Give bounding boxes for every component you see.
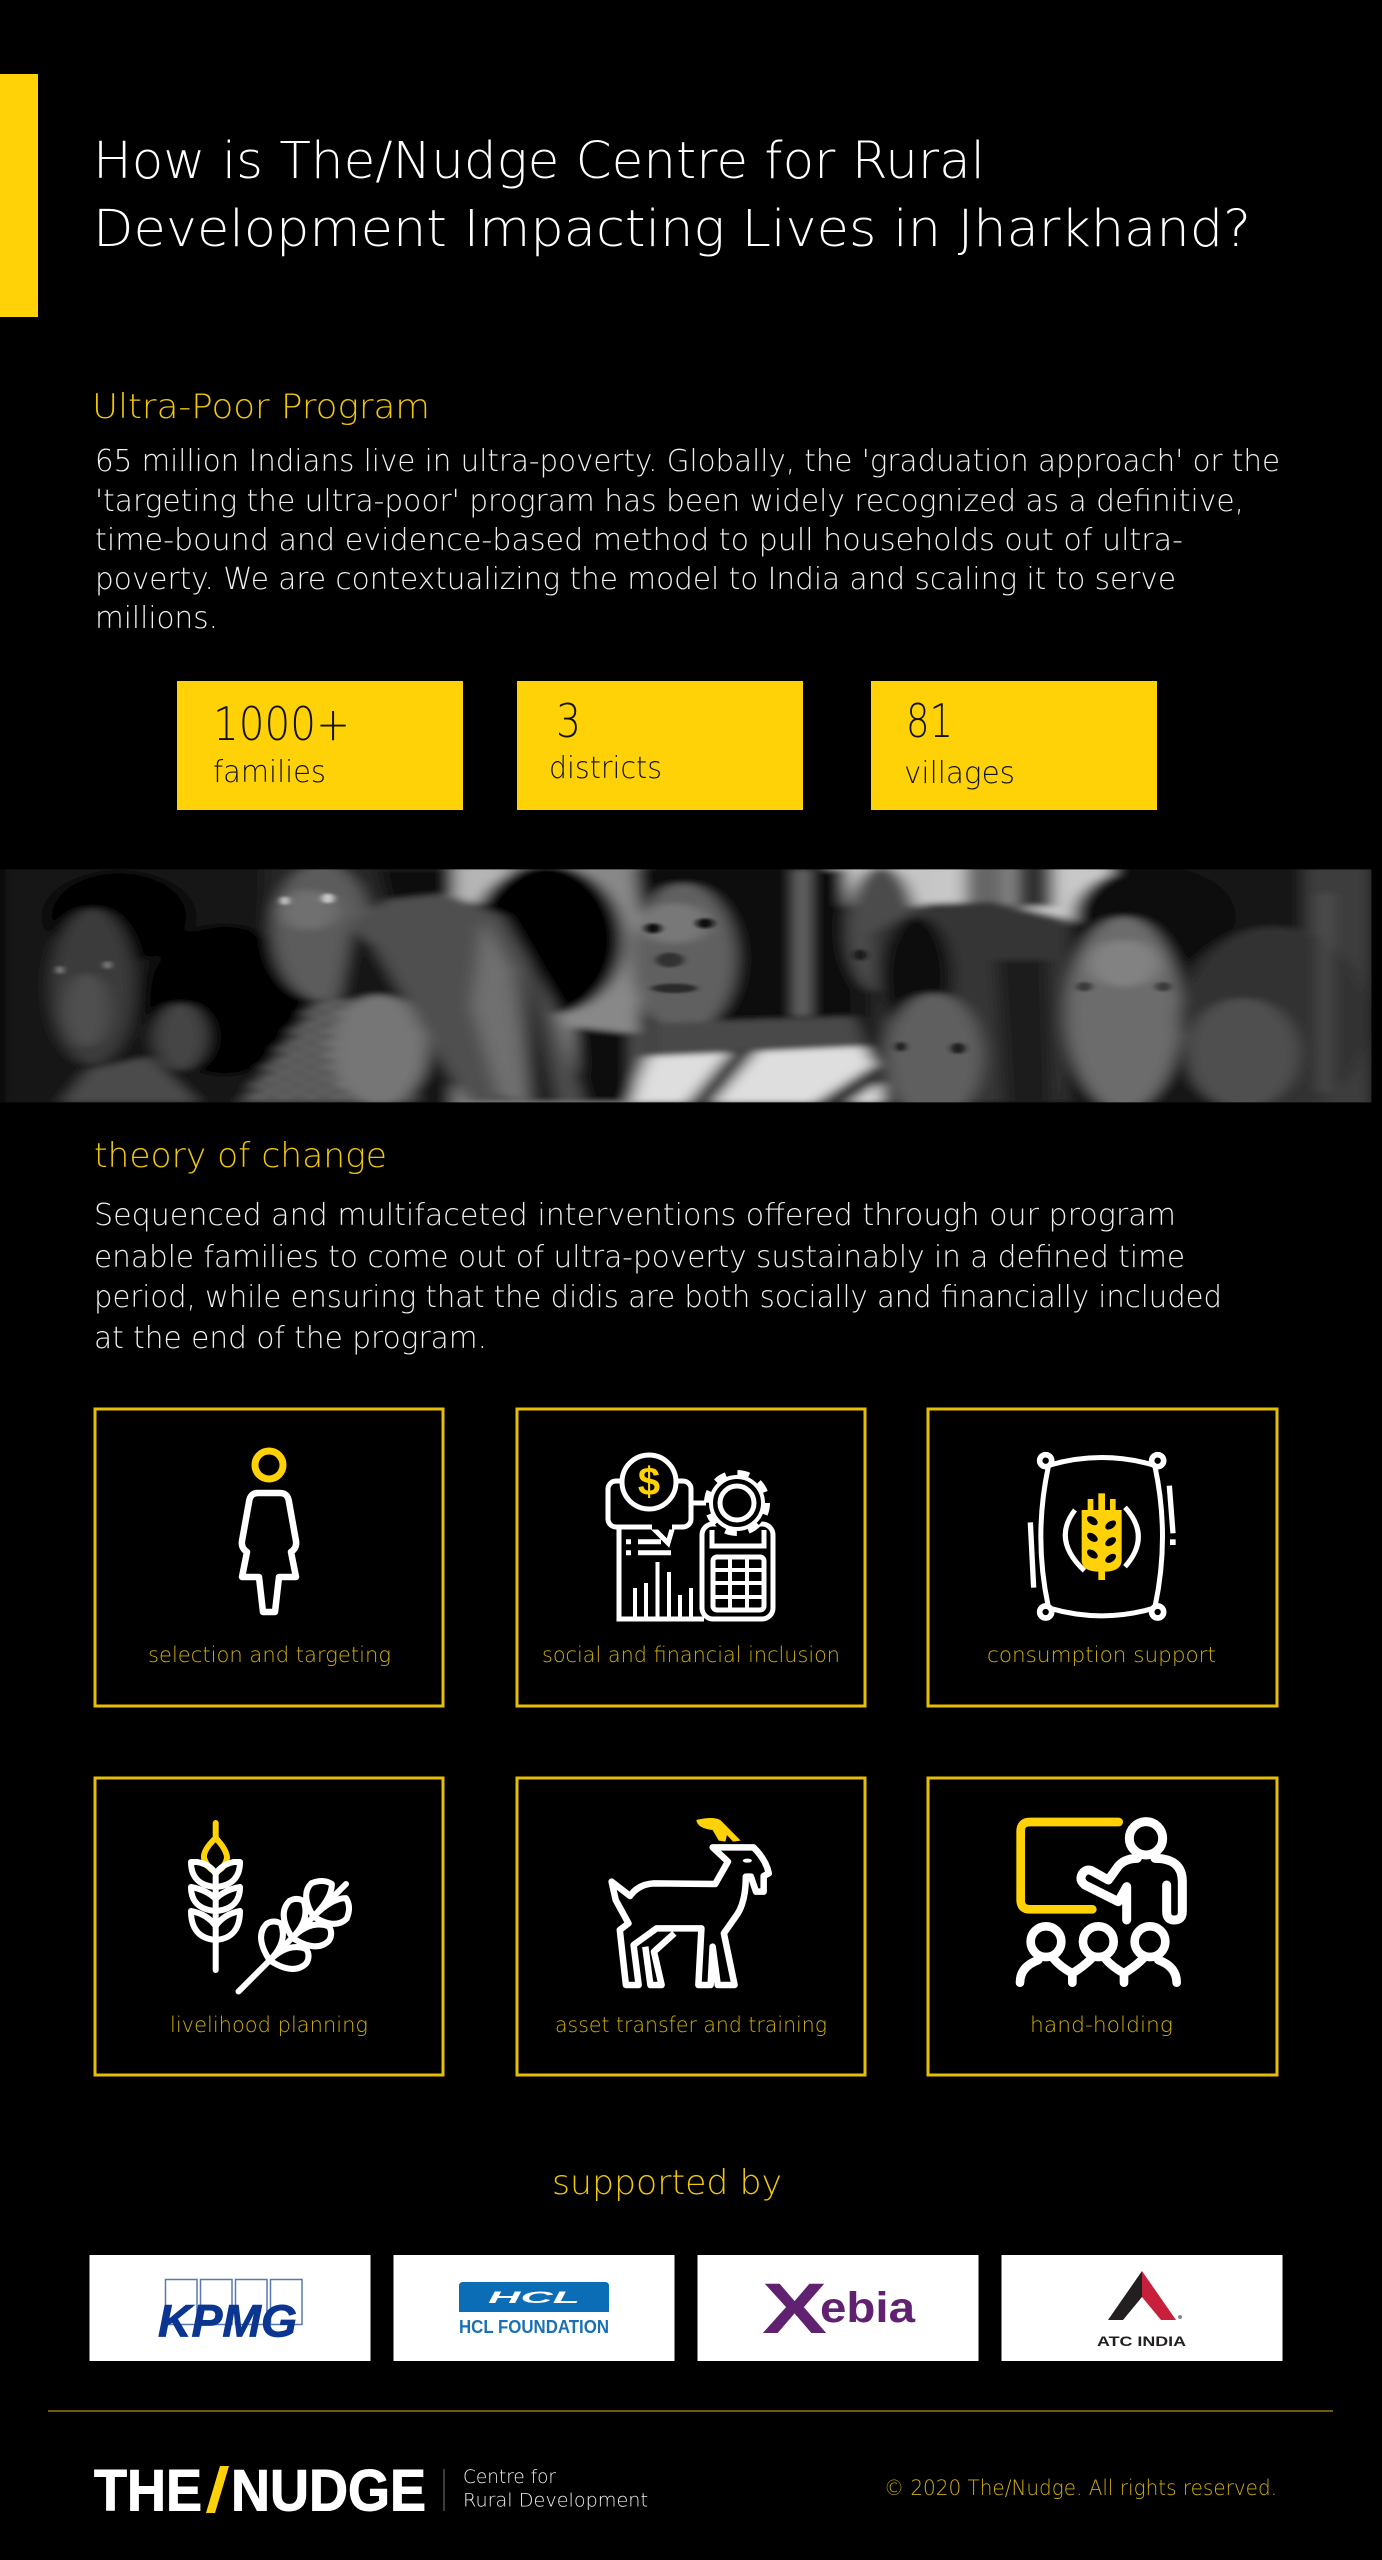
panel: livelihood planning	[95, 1778, 443, 2075]
text block: theory description: enable families to come out of ultra-poverty sustainably in a defined time	[94, 1240, 1185, 1275]
logo: Xebia	[698, 2255, 978, 2361]
logo: ATC India: ATC INDIA	[1097, 2333, 1186, 2349]
panel: selection and targeting: selection and targeting	[148, 1643, 391, 1667]
photo: women of the program	[0, 869, 1372, 1102]
stat: 81 villages	[871, 681, 1157, 810]
panel: selection and targeting	[95, 1409, 443, 1706]
logo: The/Nudge: NUDGE	[231, 2458, 426, 2524]
heading: supported by: supported by	[552, 2163, 782, 2203]
logo: ATC India	[1002, 2255, 1282, 2361]
title: How is The/Nudge Centre for Rural	[93, 132, 985, 191]
panel: asset transfer and training: asset transfer and training	[555, 2013, 827, 2037]
icon: grain sack	[1030, 1455, 1176, 1618]
logo: HCL Foundation: HCL	[488, 2288, 580, 2307]
icon: woman	[242, 1451, 296, 1612]
stat: 1000+ families	[177, 681, 463, 810]
stat: 1000+ families: 1000+	[213, 697, 350, 751]
text block: theory description: period, while ensuring that the didis are both socially and financially included	[94, 1280, 1222, 1315]
panel: consumption support	[928, 1409, 1277, 1706]
logo: The/Nudge: Centre for	[463, 2466, 556, 2488]
stat: 3 districts	[517, 681, 803, 810]
logo: Xebia: X	[762, 2270, 827, 2349]
logo: The/Nudge: Rural Development	[463, 2490, 648, 2512]
text block: program description: 'targeting the ultra-poor' program has been widely recognized as a definitive,	[95, 484, 1244, 519]
heading: Ultra-Poor Program: Ultra-Poor Program	[92, 387, 430, 427]
title	[93, 132, 1251, 259]
title: Development Impacting Lives in Jharkhand?	[93, 200, 1251, 259]
panel: hand-holding: hand-holding	[1030, 2013, 1173, 2037]
panel: social and financial inclusion	[517, 1409, 865, 1706]
text block: program description: poverty. We are contextualizing the model to India and scaling it to serve	[95, 562, 1176, 597]
icon: teacher and students	[1020, 1822, 1182, 1983]
text block: theory description: Sequenced and multifaceted interventions offered through our program	[94, 1198, 1176, 1233]
icon: finance and calculator	[608, 1455, 773, 1619]
accent bar	[0, 74, 38, 317]
logo: HCL Foundation: HCL FOUNDATION	[459, 2317, 609, 2337]
text block: theory description	[94, 1198, 1222, 1356]
logo: KPMG	[90, 2255, 370, 2361]
stat: 3 districts: 3	[556, 694, 581, 748]
stat: 1000+ families: families	[213, 755, 326, 790]
text block: program description: 65 million Indians live in ultra-poverty. Globally, the 'graduation approach' or the	[95, 444, 1280, 479]
icon: goat	[612, 1818, 769, 1985]
panel: social and financial inclusion: social and financial inclusion	[542, 1643, 840, 1667]
logo: The/Nudge	[94, 2458, 648, 2524]
footer divider	[48, 2410, 1333, 2412]
heading: theory of change: theory of change	[94, 1136, 387, 1176]
logo: KPMG: KPMG	[158, 2296, 297, 2346]
panel: consumption support: consumption support	[987, 1643, 1216, 1667]
stat: 3 districts: districts	[549, 751, 662, 786]
stat: 81 villages: 81	[906, 694, 953, 748]
text block: theory description: at the end of the program.	[94, 1321, 487, 1356]
logo: HCL Foundation	[394, 2255, 674, 2361]
logo: Xebia: ebia	[820, 2284, 916, 2332]
text block: program description: time-bound and evidence-based method to pull households out of ultra-	[95, 523, 1183, 558]
panel: asset transfer and training	[517, 1778, 865, 2075]
stat: 81 villages: villages	[904, 756, 1015, 791]
panel: livelihood planning: livelihood planning	[170, 2013, 368, 2037]
panel: hand-holding	[928, 1778, 1277, 2075]
copyright: © 2020 The/Nudge. All rights reserved.	[884, 2476, 1277, 2500]
text block: program description	[95, 444, 1280, 636]
text block: program description: millions.	[95, 601, 218, 636]
panel: social and financial inclusion: $	[638, 1460, 660, 1504]
icon: wheat stalks	[191, 1823, 366, 2011]
logo: The/Nudge: THE	[94, 2458, 202, 2524]
